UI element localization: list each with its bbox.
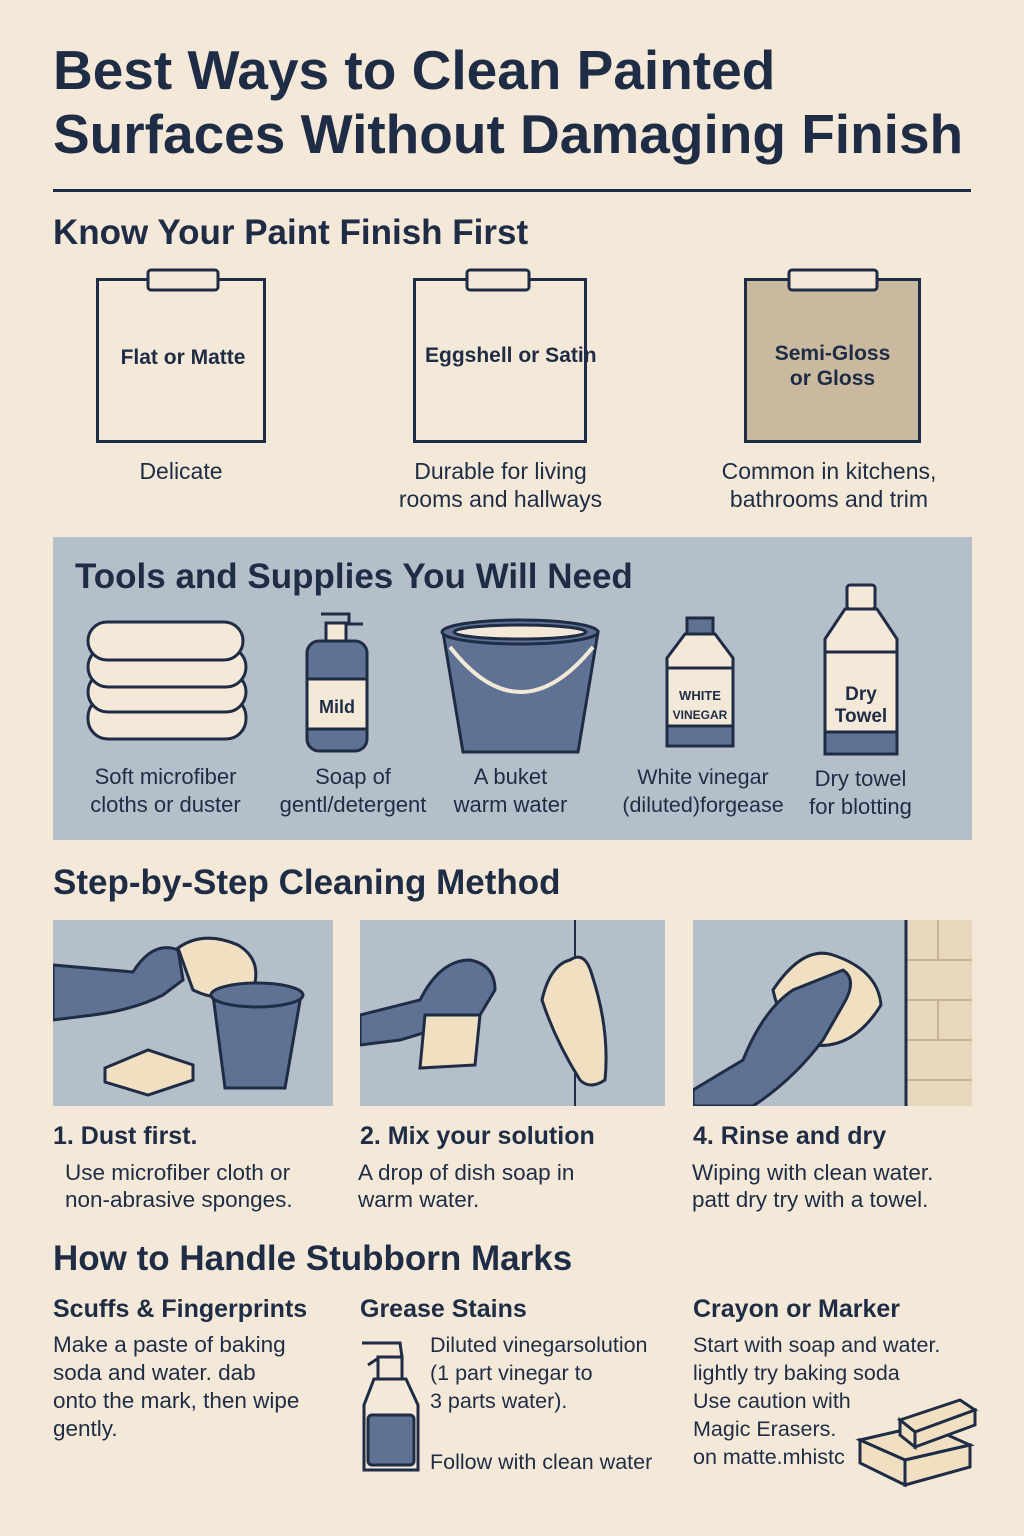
block: grease: (1 part vinegar to <box>430 1361 593 1385</box>
block: scuffs: Scuffs & Fingerprints <box>53 1295 307 1323</box>
icon: vinegar <box>666 616 734 748</box>
heading: tools: Tools and Supplies You Will Need <box>75 557 633 596</box>
step 4 <box>692 920 972 1212</box>
panel: tools: gentl/detergent <box>280 792 426 817</box>
panel: eggshell: Durable for living <box>414 458 587 484</box>
panel: semi-gloss: Common in kitchens, <box>722 458 936 484</box>
step 2 <box>358 920 665 1212</box>
block: grease: Diluted vinegarsolution <box>430 1333 648 1357</box>
panel: tools: for blotting <box>809 794 912 819</box>
panel: flat or matte <box>96 268 266 484</box>
illustration: rinse <box>693 920 972 1106</box>
icon: soap bottle <box>306 612 368 752</box>
panel: tools: cloths or duster <box>90 792 241 817</box>
block: crayon: Start with soap and water. <box>693 1333 940 1357</box>
icon: towels <box>86 620 248 740</box>
icon: vinegar: VINEGAR <box>673 708 728 722</box>
block: crayon: Crayon or Marker <box>693 1295 900 1323</box>
title <box>53 39 963 165</box>
step 4: 4. Rinse and dry <box>693 1122 886 1150</box>
illustration: mixing <box>360 920 665 1106</box>
icon: dry towel bottle: Towel <box>835 706 887 727</box>
panel: eggshell <box>399 268 602 512</box>
block: scuffs: onto the mark, then wipe <box>53 1388 299 1413</box>
panel: eggshell: Eggshell or Satin <box>425 344 597 367</box>
panel: tools: warm water <box>454 792 567 817</box>
block: scuffs: soda and water. dab <box>53 1360 256 1385</box>
icon: soap bottle: Mild <box>319 697 355 717</box>
block: scuffs: Make a paste of baking <box>53 1332 286 1357</box>
panel: tools: (diluted)forgease <box>622 793 784 817</box>
step 1: non-abrasive sponges. <box>65 1187 293 1212</box>
block: crayon <box>693 1295 978 1488</box>
step 4: patt dry try with a towel. <box>692 1187 928 1212</box>
panel: eggshell: rooms and hallways <box>399 486 602 512</box>
step 1 <box>53 920 333 1212</box>
panel: semi-gloss: bathrooms and trim <box>730 486 928 512</box>
panel: semi-gloss <box>722 268 936 512</box>
heading: steps: Step-by-Step Cleaning Method <box>53 863 560 902</box>
heading: paint finish: Know Your Paint Finish First <box>53 213 528 252</box>
step 2: 2. Mix your solution <box>360 1122 595 1150</box>
block: crayon: Use caution with <box>693 1389 851 1413</box>
step 1: Use microfiber cloth or <box>65 1160 290 1185</box>
block: crayon: on matte.mhistc <box>693 1445 845 1469</box>
panel: tools: Soap of <box>315 764 391 789</box>
title: Surfaces Without Damaging Finish <box>53 103 963 165</box>
icon: dry towel bottle <box>824 584 898 756</box>
panel: tools: Soft microfiber <box>95 764 236 789</box>
block: grease: Follow with clean water <box>430 1450 652 1474</box>
step 2: warm water. <box>358 1187 479 1212</box>
illustration: dusting <box>53 920 333 1106</box>
block: grease: 3 parts water). <box>430 1389 567 1413</box>
step 4: Wiping with clean water. <box>692 1160 933 1185</box>
panel: flat or matte: Flat or Matte <box>121 346 245 369</box>
block: scuffs: gently. <box>53 1416 118 1441</box>
step 2: A drop of dish soap in <box>358 1160 574 1185</box>
block: grease <box>360 1295 652 1474</box>
icon: spray bottle <box>362 1342 420 1472</box>
block: grease: Grease Stains <box>360 1295 527 1323</box>
block: crayon: lightly try baking soda <box>693 1361 900 1385</box>
panel: tools <box>53 537 972 840</box>
panel: tools: Dry towel <box>815 766 906 791</box>
panel: tools: A buket <box>474 764 547 789</box>
heading: stubborn marks: How to Handle Stubborn Marks <box>53 1239 572 1278</box>
panel: flat or matte: Delicate <box>139 458 223 484</box>
panel: semi-gloss: or Gloss <box>790 367 875 390</box>
block: crayon: Magic Erasers. <box>693 1417 836 1441</box>
step 1: 1. Dust first. <box>53 1122 197 1150</box>
icon: magic eraser <box>856 1398 978 1488</box>
panel: semi-gloss: Semi-Gloss <box>775 342 890 365</box>
icon: vinegar: WHITE <box>679 688 721 703</box>
block: scuffs <box>53 1295 307 1441</box>
title: Best Ways to Clean Painted <box>53 39 775 101</box>
icon: bucket <box>440 618 600 754</box>
panel: tools: White vinegar <box>637 765 769 789</box>
icon: dry towel bottle: Dry <box>845 684 877 705</box>
